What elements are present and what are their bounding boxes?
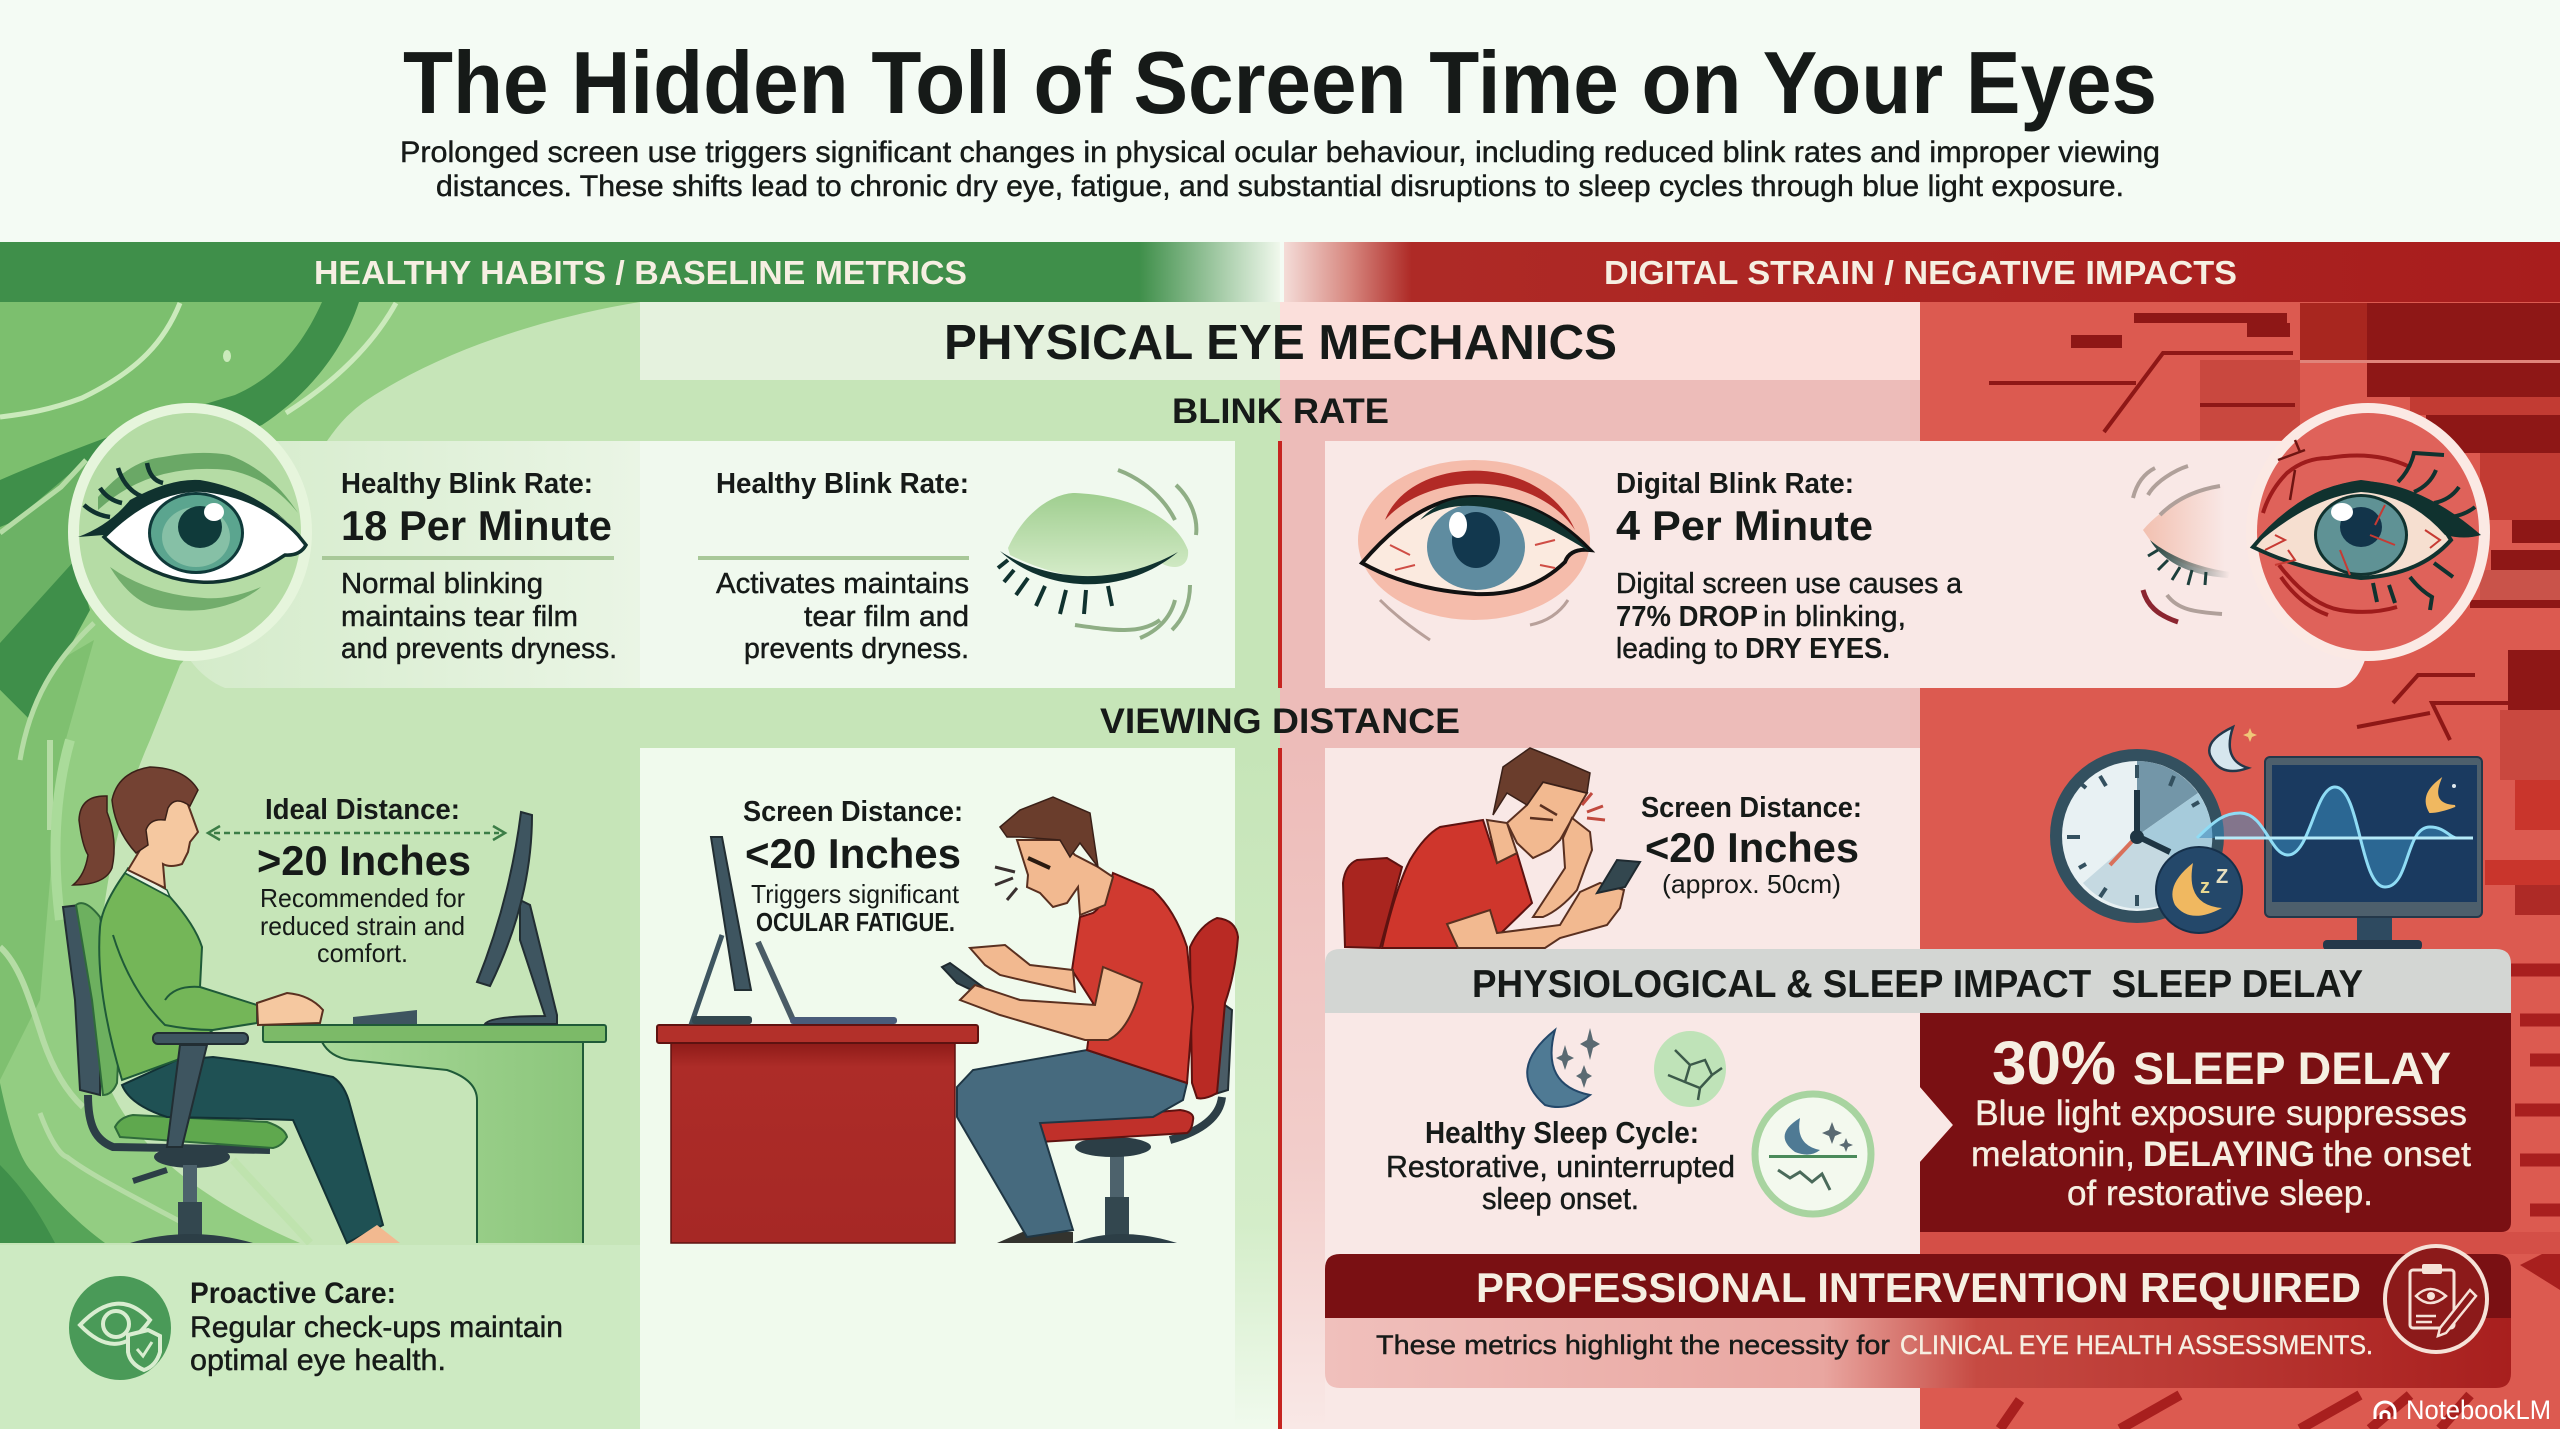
callout: 30% sleep delay: the onset: [2323, 1135, 2471, 1174]
text: screen distance: Screen Distance:: [743, 796, 963, 828]
red desk: [657, 1025, 978, 1243]
header band: digital strain: [1284, 242, 2560, 302]
icon: closed eye: [998, 470, 1196, 638]
arrow: distance: [208, 826, 505, 840]
text: activates tear film: Activates maintains: [716, 568, 969, 600]
text: activates tear film: [698, 468, 969, 665]
icon: bloodshot eye in circle: [2246, 403, 2490, 661]
panel: proactive care: [0, 1245, 640, 1429]
right column background scene: [1920, 302, 2560, 1429]
text: screen distance: [1641, 792, 1862, 899]
feet: [350, 1225, 400, 1243]
sub-heading: viewing distance: [640, 688, 1920, 748]
text: digital blink rate: [1616, 468, 1963, 665]
hair and ponytail: [73, 767, 198, 885]
sweater torso and arm: [99, 868, 257, 1080]
shoes: [997, 1230, 1073, 1243]
text: activates tear film: tear film and: [804, 601, 969, 633]
header band: digital strain: DIGITAL STRAIN / NEGATIVE IMPACTS: [1604, 254, 2237, 291]
text: screen distance: (approx. 50cm): [1662, 869, 1841, 899]
callout: 30% sleep delay: SLEEP DELAY: [2133, 1043, 2451, 1094]
text: ideal distance: >20 Inches: [257, 837, 471, 884]
text: healthy sleep cycle: Restorative, uninterrupted: [1386, 1149, 1735, 1184]
red t-shirt: [1072, 873, 1193, 1083]
text: screen distance: OCULAR FATIGUE.: [756, 907, 955, 937]
callout: 30% sleep delay: of restorative sleep.: [2067, 1174, 2373, 1213]
callout: 30% sleep delay: 30%: [1992, 1029, 2116, 1097]
moon badge: [2156, 847, 2242, 933]
panel: digital blink rate: [1325, 403, 2490, 688]
icon: melatonin molecule: [1654, 1031, 1726, 1107]
text: ideal distance: [208, 794, 505, 968]
text: ideal distance: Recommended for: [260, 883, 465, 913]
text: healthy sleep cycle: [1386, 1115, 1735, 1216]
watermark: NotebookLM: NotebookLM: [2406, 1395, 2551, 1425]
text: ideal distance: Ideal Distance:: [265, 794, 460, 826]
monitor with waveform: [2197, 757, 2482, 950]
intro text: Prolonged screen use triggers significant changes in physical ocular behaviour, including reduced blink rates and improper viewing: [400, 136, 2160, 169]
jeans: [957, 1050, 1187, 1237]
arm and hand with phone: [942, 945, 1142, 1040]
section heading: physical eye mechanics: PHYSICAL EYE MECHANICS: [944, 316, 1617, 370]
text: healthy blink rate: [322, 468, 617, 665]
title: The Hidden Toll of Screen Time on Your Eyes: [403, 33, 2157, 132]
text: digital blink rate: DRY EYES.: [1745, 633, 1890, 665]
clock: [2050, 749, 2224, 923]
section heading: physical eye mechanics: [640, 302, 1920, 380]
text: healthy blink rate: Healthy Blink Rate:: [341, 468, 593, 500]
man rubbing eyes: [1343, 748, 1640, 948]
icon: clipboard with eye: [2385, 1246, 2487, 1352]
text: proactive care: optimal eye health.: [190, 1344, 446, 1377]
moon badge: z: [2200, 876, 2210, 898]
text: activates tear film: prevents dryness.: [744, 633, 969, 665]
intervention heading: PROFESSIONAL INTERVENTION REQUIRED: [1476, 1264, 2361, 1311]
center divider lower: [1278, 748, 1282, 1429]
red chair: [1037, 918, 1238, 1243]
intervention text: [1376, 1330, 2373, 1360]
sub-heading: blink rate: BLINK RATE: [1172, 392, 1389, 431]
panel: healthy blink rate: [68, 403, 1235, 688]
callout: 30% sleep delay: DELAYING: [2143, 1135, 2315, 1174]
monitor: [353, 812, 557, 1024]
panel: woman at ideal distance: [63, 767, 606, 1243]
panel: screen distance fatigue: [640, 748, 1280, 1429]
callout: 30% sleep delay: melatonin,: [1971, 1135, 2135, 1174]
green strip and pink strip beside blink panels: [1235, 441, 1325, 688]
star: [2243, 728, 2257, 742]
text: proactive care: Proactive Care:: [190, 1277, 396, 1310]
intervention text: These metrics highlight the necessity for: [1376, 1330, 1890, 1360]
moon badge: Z: [2216, 866, 2228, 888]
sleep impact heading: PHYSIOLOGICAL & SLEEP IMPACT SLEEP DELAY: [1472, 963, 2363, 1006]
text: ideal distance: reduced strain and: [260, 911, 465, 941]
text: healthy sleep cycle: sleep onset.: [1482, 1181, 1639, 1216]
icon: sleep cycle circle: [1755, 1094, 1871, 1214]
text: healthy sleep cycle: Healthy Sleep Cycle:: [1425, 1115, 1699, 1150]
hand: [257, 993, 323, 1025]
head: [128, 783, 198, 888]
panel: screen distance strain: [1280, 748, 1920, 1429]
icon: clock and monitor sleep disruption: [2050, 727, 2482, 950]
text: healthy blink rate: and prevents dryness.: [341, 633, 617, 665]
monitor and laptop: [692, 837, 897, 1024]
trousers: [122, 1057, 383, 1243]
sub-heading: blink rate: [640, 380, 1920, 441]
icon: half-closed eye: [2133, 466, 2230, 622]
center divider upper: [1278, 441, 1282, 688]
chair: [63, 903, 287, 1243]
desk: [263, 1025, 606, 1243]
text: proactive care: Regular check-ups maintain: [190, 1311, 563, 1344]
panel: physiological and sleep impact: [1325, 949, 2511, 1232]
text: healthy blink rate: maintains tear film: [341, 601, 578, 633]
text: healthy blink rate: 18 Per Minute: [341, 502, 612, 549]
text: screen distance: <20 Inches: [1645, 824, 1859, 871]
intro text: distances. These shifts lead to chronic dry eye, fatigue, and substantial disruptions to sleep cycles through blue light exposure.: [436, 170, 2124, 203]
crescent moon: [2209, 727, 2248, 771]
text: healthy blink rate: Normal blinking: [341, 568, 543, 600]
callout: 30% sleep delay: [1971, 1029, 2471, 1213]
text: digital blink rate: 4 Per Minute: [1616, 502, 1873, 549]
icon: eye with shield: [69, 1276, 171, 1380]
header band: healthy habits: HEALTHY HABITS / BASELINE METRICS: [314, 254, 967, 291]
header band: healthy habits: [0, 242, 1280, 302]
text: digital blink rate: 77% DROP: [1616, 601, 1758, 633]
intro text: [400, 136, 2160, 203]
icon: moon and stars: [1527, 1028, 1600, 1107]
text: digital blink rate: in blinking,: [1763, 601, 1906, 633]
icon: strained eye: [1358, 460, 1590, 640]
armrest: [153, 1033, 248, 1147]
panel: professional intervention: [1325, 1246, 2511, 1388]
intervention text: CLINICAL EYE HEALTH ASSESSMENTS.: [1900, 1330, 2373, 1360]
callout: 30% sleep delay: Blue light exposure suppresses: [1975, 1094, 2467, 1133]
angry head: [995, 797, 1113, 915]
text: activates tear film: Healthy Blink Rate:: [716, 468, 969, 500]
text: ideal distance: comfort.: [317, 938, 408, 968]
text: screen distance: Screen Distance:: [1641, 792, 1862, 824]
text: screen distance: [743, 796, 963, 937]
text: digital blink rate: leading to: [1616, 633, 1738, 665]
icon: healthy eye in circle: [68, 403, 312, 661]
text: screen distance: Triggers significant: [751, 879, 960, 909]
sub-heading: viewing distance: VIEWING DISTANCE: [1100, 702, 1460, 741]
text: screen distance: <20 Inches: [745, 830, 961, 877]
text: digital blink rate: Digital screen use causes a: [1616, 568, 1963, 600]
text: proactive care: [190, 1277, 563, 1377]
text: digital blink rate: Digital Blink Rate:: [1616, 468, 1854, 500]
left column background scene: [0, 302, 640, 1245]
